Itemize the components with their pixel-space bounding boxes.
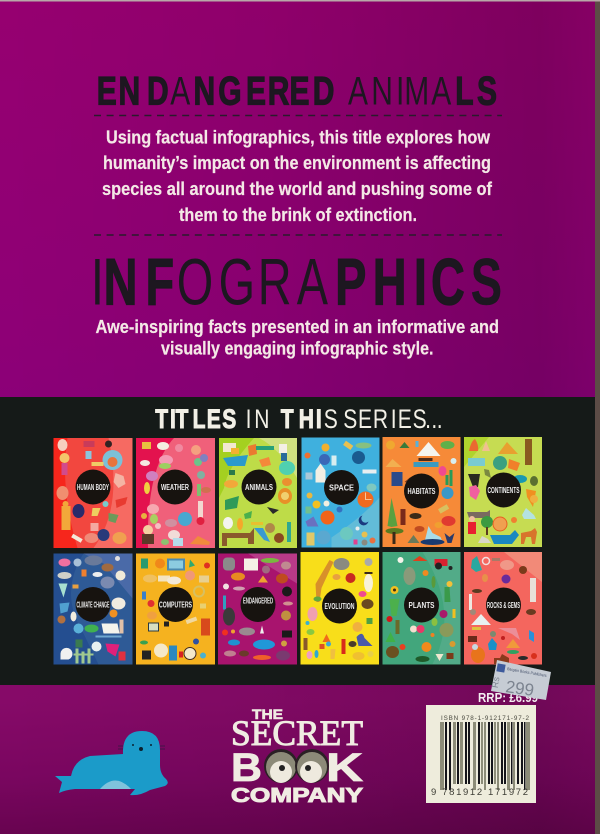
dashed divider bottom — [94, 234, 502, 236]
cover disc — [486, 588, 521, 622]
cover disc — [242, 470, 276, 504]
title: Infographics: INFOGRAPHICS — [91, 246, 502, 319]
book cover: Habitats: HABITATS — [408, 487, 436, 496]
cover disc — [404, 588, 439, 622]
seal mascot — [55, 731, 168, 795]
cover disc — [76, 587, 110, 622]
book cover: Human Body: HUMAN BODY — [77, 483, 109, 492]
cover disc — [158, 470, 192, 504]
publisher logo: The Secret Book Company — [231, 706, 364, 807]
description text block: species all around the world and pushing some of — [102, 179, 493, 199]
cover disc — [404, 474, 439, 508]
book top edge — [0, 0, 600, 2]
publisher logo: The Secret Book Company: B — [231, 746, 262, 790]
book cover: Evolution — [300, 552, 379, 664]
book cover: Rocks and Gems: ROCKS & GEMS — [487, 601, 520, 610]
price sticker — [490, 660, 551, 700]
book cover: Weather — [136, 438, 215, 548]
book cover: Computers: COMPUTERS — [159, 600, 192, 610]
price sticker: Rs — [490, 676, 502, 689]
book cover: Animals — [219, 438, 297, 548]
book cover: Endangered Animals — [218, 554, 297, 664]
book cover: Continents — [464, 437, 542, 547]
publisher logo: The Secret Book Company: K — [326, 746, 363, 790]
dashed divider top — [94, 114, 502, 116]
cover disc — [76, 470, 110, 504]
publisher logo: The Secret Book Company: SECRET — [231, 713, 363, 753]
publisher logo: The Secret Book Company: THE — [252, 706, 283, 722]
book cover: Plants: PLANTS — [408, 601, 435, 610]
book cover: Space — [302, 438, 380, 548]
description text block — [102, 128, 493, 225]
cover disc — [158, 587, 193, 622]
book cover: Habitats — [382, 437, 460, 547]
cover disc — [486, 472, 521, 508]
book cover: Climate Change: CLIMATE CHANGE — [76, 600, 110, 610]
RRP price: RRP: £6.99 — [478, 691, 538, 705]
price sticker: 299 — [504, 677, 535, 700]
series description text: visually engaging infographic style. — [161, 338, 434, 358]
publisher logo: The Secret Book Company: COMPANY — [231, 785, 364, 807]
cover disc — [324, 470, 359, 505]
book cover: Climate Change — [54, 554, 132, 664]
logo eyes — [264, 749, 329, 783]
series description text — [96, 317, 499, 358]
book cover: Space: SPACE — [329, 484, 355, 492]
description text block: humanity’s impact on the environment is affecting — [103, 153, 491, 173]
book cover: Rocks and Gems — [464, 552, 542, 664]
price sticker: Bargain Books Publishers — [507, 666, 547, 678]
book right edge — [595, 0, 600, 834]
description text block: Using factual infographics, this title explores how — [106, 128, 491, 148]
book cover: Plants — [382, 552, 460, 664]
book cover: Continents: CONTINENTS — [488, 486, 520, 495]
book cover: Human Body — [54, 438, 132, 548]
book cover: Evolution: EVOLUTION — [324, 602, 355, 611]
barcode — [426, 705, 536, 803]
book cover: Weather: WEATHER — [161, 483, 189, 492]
title: Endangered Animals: ENDANGERED ANIMALS — [97, 69, 497, 114]
book cover: Endangered Animals: ENDANGERED — [243, 596, 273, 606]
black series band — [0, 397, 595, 685]
barcode: ISBN 978-1-912171-97-2 — [441, 715, 529, 722]
series description text: Awe-inspiring facts presented in an informative and — [96, 317, 499, 337]
barcode: 9 781912 171972 — [431, 787, 528, 798]
cover disc — [322, 588, 357, 624]
cover disc — [240, 587, 276, 622]
description text block: them to the brink of extinction. — [179, 205, 417, 225]
book cover: Animals: ANIMALS — [245, 483, 274, 492]
heading: Titles in this series: TITLES IN THIS SERIES... — [155, 405, 443, 435]
book cover: Computers — [136, 554, 215, 664]
